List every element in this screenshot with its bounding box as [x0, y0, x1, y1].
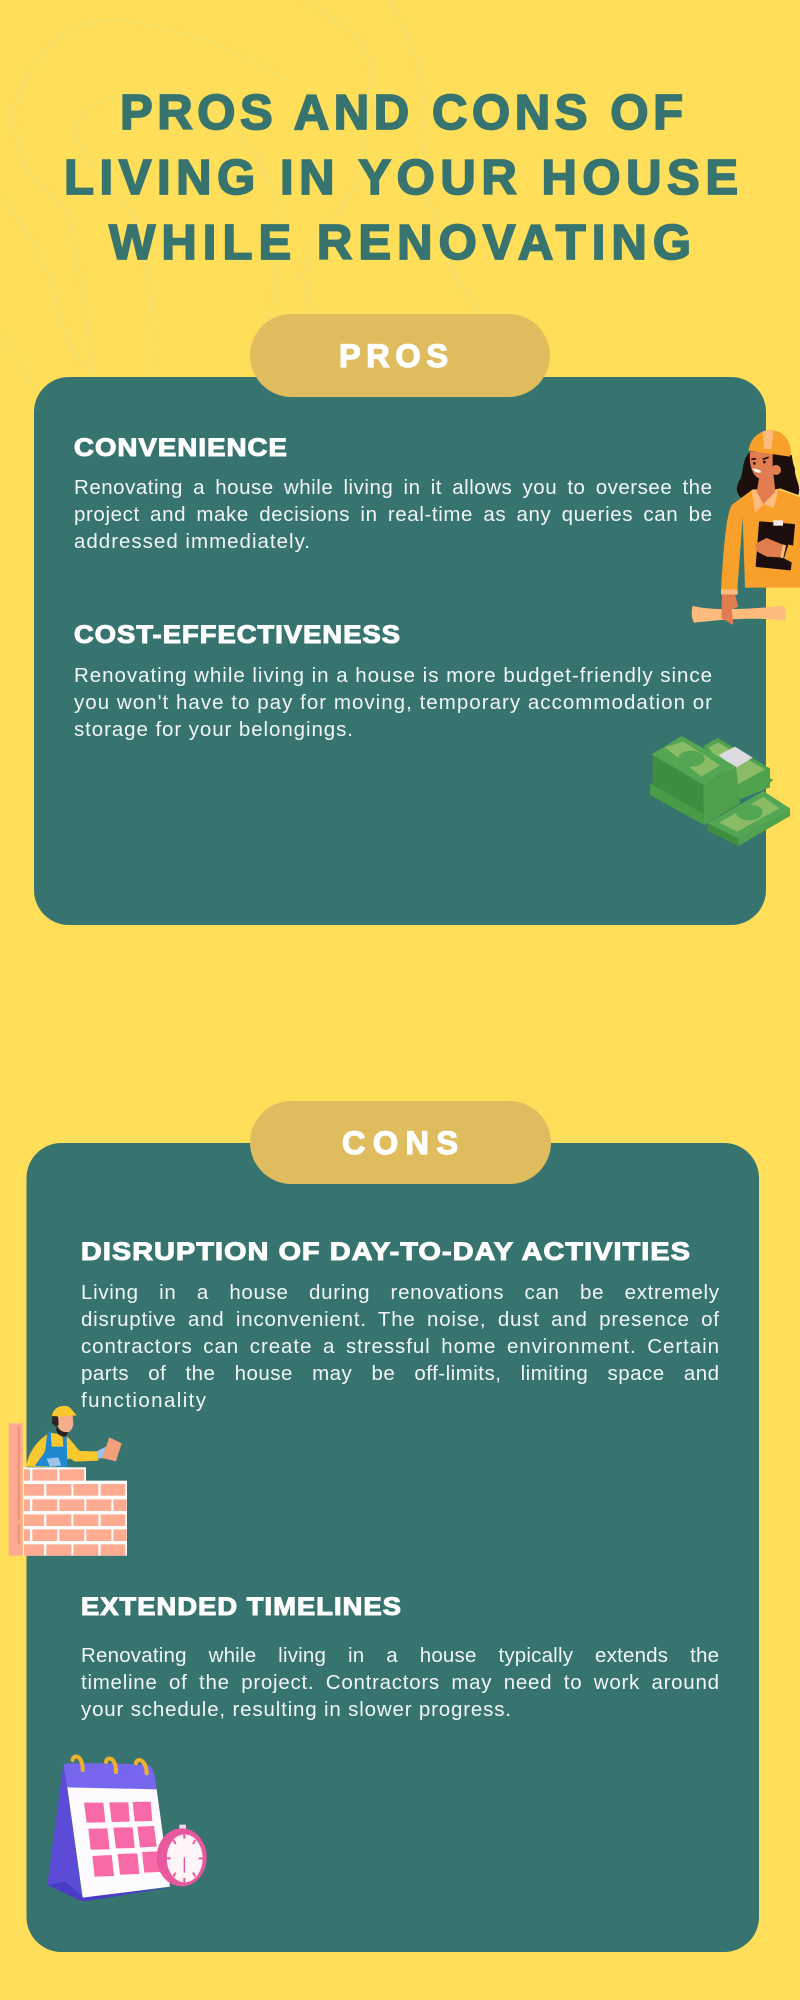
- heading: extended timelines: EXTENDED TIMELINES: [81, 1593, 402, 1621]
- text block: disruption: [81, 1281, 720, 1412]
- pros badge: PROS: [339, 338, 448, 374]
- text block: disruption: Living in a house during renovations can be extremely: [81, 1281, 720, 1304]
- cons badge: [250, 1101, 551, 1184]
- text block: disruption: disruptive and inconvenient. The noise, dust and presence of: [81, 1308, 719, 1331]
- icon: stacks of cash: [650, 736, 790, 846]
- heading: cost-effectiveness: COST-EFFECTIVENESS: [74, 621, 401, 649]
- text block: extended timelines: Renovating while living in a house typically extends the: [81, 1644, 719, 1667]
- heading: disruption of day-to-day activities: DISRUPTION OF DAY-TO-DAY ACTIVITIES: [81, 1238, 691, 1266]
- title: WHILE RENOVATING: [109, 216, 691, 270]
- text block: disruption: functionality: [81, 1389, 207, 1412]
- title: LIVING IN YOUR HOUSE: [64, 151, 738, 205]
- panel: cons: [26, 1101, 759, 1952]
- cons badge: CONS: [342, 1125, 458, 1161]
- panel: pros: [34, 314, 766, 925]
- icon: woman with helmet and blueprint: [692, 430, 800, 625]
- title: [64, 86, 738, 270]
- text block: extended timelines: your schedule, resulting in slower progress.: [81, 1698, 511, 1721]
- text block: cost-effectiveness: you won't have to pay for moving, temporary accommodation or: [74, 691, 712, 714]
- text block: extended timelines: timeline of the project. Contractors may need to work around: [81, 1671, 719, 1694]
- heading: convenience: CONVENIENCE: [74, 434, 288, 462]
- text block: extended timelines: [81, 1644, 719, 1721]
- icon: bricklayer and wall: [9, 1406, 127, 1556]
- text block: convenience: addressed immediately.: [74, 530, 310, 553]
- pros badge: [250, 314, 550, 397]
- text block: disruption: contractors can create a stressful home environment. Certain: [81, 1335, 719, 1358]
- icon: calendar and stopwatch: [47, 1756, 207, 1902]
- text block: convenience: [74, 476, 712, 553]
- text block: cost-effectiveness: Renovating while living in a house is more budget-friendly since: [74, 664, 712, 687]
- text block: disruption: parts of the house may be off-limits, limiting space and: [81, 1362, 719, 1385]
- text block: cost-effectiveness: [74, 664, 712, 741]
- title: PROS AND CONS OF: [120, 86, 683, 140]
- text block: cost-effectiveness: storage for your belongings.: [74, 718, 353, 741]
- text block: convenience: Renovating a house while living in it allows you to oversee the: [74, 476, 712, 499]
- text block: convenience: project and make decisions in real-time as any queries can be: [74, 503, 712, 526]
